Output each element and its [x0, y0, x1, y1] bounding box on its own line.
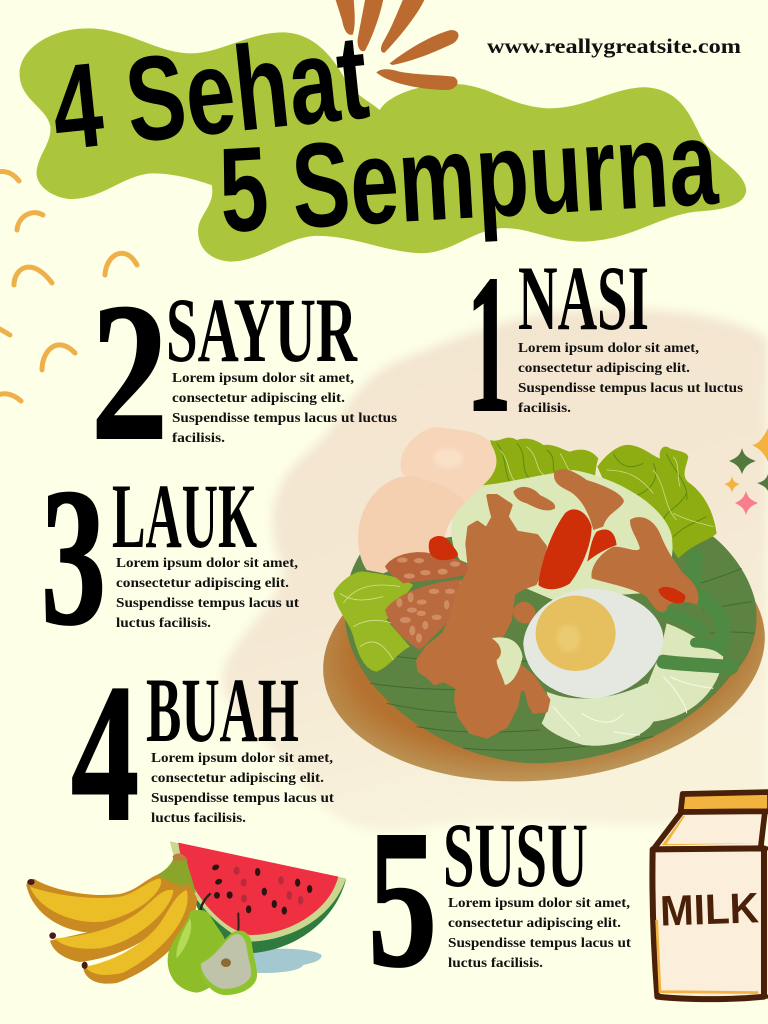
body text: Lorem ipsum dolor sit amet,: [448, 896, 630, 911]
cracker top: [401, 427, 497, 503]
krupuk crackers: [358, 427, 497, 573]
pear highlight: [176, 918, 191, 958]
heading lauk: LAUK: [112, 465, 257, 567]
section 5: susu: [368, 789, 631, 1008]
heading buah: BUAH: [146, 659, 299, 761]
boiled egg: [523, 588, 663, 698]
body text: consectetur adipiscing elit.: [448, 916, 621, 931]
pale cabbage front: [542, 683, 657, 746]
lettuce veins light: [500, 447, 713, 527]
illustration: milk carton: [652, 792, 768, 999]
leaf veins: [357, 568, 755, 750]
watermelon rind: [170, 842, 346, 953]
body text: [116, 556, 299, 631]
body text: consectetur adipiscing elit.: [116, 576, 289, 591]
pear half: [200, 931, 257, 995]
banana leaf: [344, 520, 757, 763]
back lettuce right: [597, 445, 717, 558]
front left lettuce: [333, 571, 413, 672]
decorative orange arcs: [0, 171, 137, 401]
banana front: [85, 885, 196, 982]
seeds: [211, 863, 312, 915]
body text: facilisis.: [172, 431, 225, 446]
chili small: [429, 536, 458, 560]
section 1: nasi: 1: [467, 234, 511, 453]
back lettuce left: [482, 438, 598, 487]
section 1: nasi: [467, 234, 744, 453]
carton front: [652, 848, 764, 999]
body text: Suspendisse tempus lacus ut: [116, 596, 299, 611]
body text: Lorem ipsum dolor sit amet,: [172, 371, 354, 386]
pale cabbage right: [647, 623, 723, 722]
green beans: [663, 557, 732, 667]
banana stem: [157, 858, 196, 893]
body text: luctus facilisis.: [116, 616, 211, 631]
sauce patch top: [513, 487, 555, 510]
banana top: [27, 876, 177, 932]
watermelon pale rind: [170, 842, 346, 942]
icon: burst strokes: [336, 0, 458, 90]
tempeh top: [385, 552, 475, 583]
watermelon flesh: [178, 843, 338, 935]
pale seeds: [234, 867, 303, 905]
body text: [172, 371, 398, 446]
lettuce veins dark: [497, 443, 707, 537]
pear half stem: [235, 913, 242, 931]
front lettuce veins: [340, 585, 400, 660]
chili long: [538, 509, 592, 589]
milk label: MILK: [659, 884, 760, 936]
banana middle: [52, 885, 187, 961]
body text: Suspendisse tempus lacus ut luctus: [172, 411, 398, 426]
pear stem: [201, 893, 211, 910]
pear core: [221, 958, 231, 967]
number 3: 3: [41, 447, 106, 666]
yolk highlight: [557, 625, 580, 652]
carton slope: [653, 811, 765, 849]
body text: [448, 896, 631, 971]
green title blob: [20, 28, 746, 262]
peanut sauce centre: [418, 496, 548, 737]
body text: luctus facilisis.: [151, 811, 246, 826]
pear half inner: [201, 934, 251, 989]
website url: www.reallygreatsite.com: [487, 34, 742, 58]
heading susu: SUSU: [443, 804, 588, 906]
sauce patch right top: [554, 469, 624, 530]
chili tip: [658, 587, 685, 603]
carton shading: [657, 920, 758, 993]
cabbage fragment: [492, 637, 523, 685]
section 4: buah: [71, 643, 334, 862]
pear whole: [168, 910, 227, 993]
body text: consectetur adipiscing elit.: [518, 361, 690, 376]
plate rim: [310, 504, 768, 802]
watercolor stain: [222, 309, 768, 831]
chili short: [587, 529, 617, 562]
body text: Suspendisse tempus lacus ut luctus: [518, 381, 744, 396]
number 4: 4: [71, 643, 139, 862]
yolk: [536, 596, 616, 671]
body text: Lorem ipsum dolor sit amet,: [116, 556, 298, 571]
body text: Suspendisse tempus lacus ut: [448, 936, 631, 951]
heading sayur: SAYUR: [166, 279, 358, 381]
section 2: sayur: [91, 262, 398, 481]
carton top cap: [681, 792, 768, 812]
cracker highlight: [433, 448, 463, 468]
tempeh spots: [396, 557, 471, 643]
body text: facilisis.: [518, 401, 571, 416]
cabbage veins: [553, 677, 713, 737]
body text: luctus facilisis.: [448, 956, 543, 971]
illustration: fruits: [27, 842, 346, 995]
body text: [151, 751, 334, 826]
body text: [518, 341, 744, 416]
section 3: lauk: [41, 447, 299, 666]
banana crown: [173, 853, 188, 861]
sauce patch oval: [509, 598, 539, 628]
banana tips: [27, 879, 88, 969]
cabbage mound: [451, 470, 673, 600]
body text: consectetur adipiscing elit.: [151, 771, 324, 786]
carton side: [765, 848, 768, 997]
sparkles: [724, 428, 768, 515]
heading nasi: NASI: [518, 247, 649, 349]
egg white: [523, 588, 663, 698]
sauce patch right: [591, 517, 699, 612]
title line 1: 4 Sehat: [46, 10, 374, 176]
plate shadow: [250, 949, 322, 973]
banana top light: [30, 878, 161, 922]
illustration: gado-gado plate: [310, 427, 768, 802]
slope shading: [662, 815, 758, 845]
number 5: 5: [368, 789, 437, 1008]
body text: Lorem ipsum dolor sit amet,: [518, 341, 699, 356]
cracker bottom: [358, 476, 465, 573]
body text: Lorem ipsum dolor sit amet,: [151, 751, 333, 766]
tempeh bottom: [385, 578, 475, 650]
body text: consectetur adipiscing elit.: [172, 391, 345, 406]
number 2: 2: [91, 262, 168, 481]
body text: Suspendisse tempus lacus ut: [151, 791, 334, 806]
title: [46, 10, 722, 258]
